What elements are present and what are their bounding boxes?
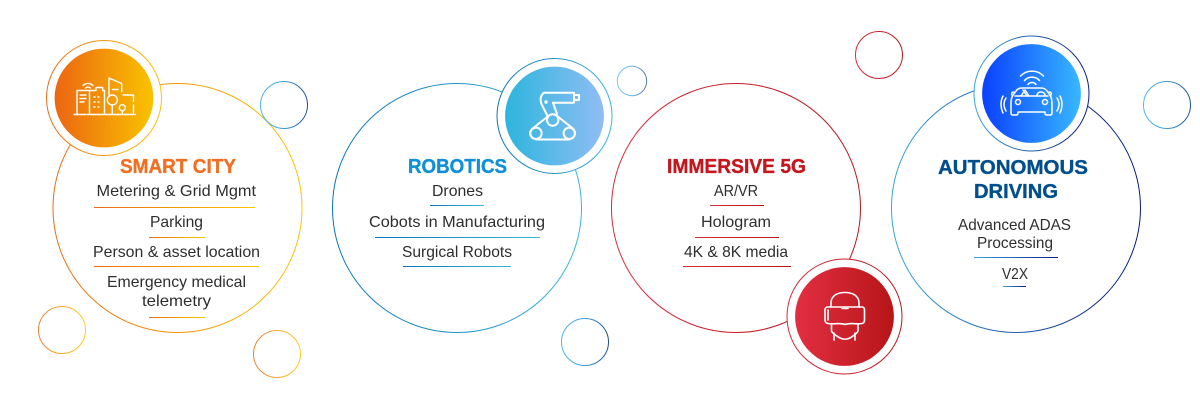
icon: vr headset: [787, 259, 902, 374]
smart city main circle: [53, 84, 302, 332]
robotics decorative bubble, bottom: [562, 318, 608, 366]
smart city decorative bubble, blue: [260, 82, 308, 128]
panel: immersive 5g: [612, 32, 902, 374]
smart city decorative bubble, lower left: [38, 306, 86, 354]
heading: autonomous driving: AUTONOMOUS: [938, 157, 1088, 179]
robotics main circle: [332, 84, 582, 332]
panel: autonomous driving: Processing: [977, 235, 1053, 252]
autonomous decorative bubble: [1144, 82, 1190, 128]
item: drones: Drones: [432, 183, 483, 200]
item: person and asset location: Person & asset location: [93, 244, 260, 261]
heading: autonomous driving: DRIVING: [974, 181, 1058, 203]
smart city decorative bubble, lower right: [254, 330, 300, 378]
icon: connected car: [974, 36, 1089, 151]
panel: robotics: [332, 58, 647, 366]
item: emergency medical telemetry: Emergency medical: [107, 274, 246, 291]
panel: smart city: telemetry: [142, 293, 211, 310]
icon: smart city buildings: [46, 40, 162, 156]
item: parking: Parking: [150, 214, 203, 231]
item: surgical robots: Surgical Robots: [402, 244, 512, 261]
robotics decorative bubble, top: [617, 66, 647, 96]
immersive main circle: [612, 84, 860, 332]
icon: robot arm: [497, 58, 612, 174]
autonomous main circle: [892, 84, 1140, 332]
item: metering: Metering & Grid Mgmt: [96, 183, 257, 200]
panel: autonomous driving: [892, 36, 1190, 332]
panel: smart city: [38, 40, 308, 378]
heading: immersive 5g: IMMERSIVE 5G: [667, 156, 806, 178]
immersive decorative bubble: [856, 32, 902, 78]
item: hologram: Hologram: [701, 214, 771, 231]
item: advanced adas processing: Advanced ADAS: [958, 217, 1071, 234]
heading: smart city: SMART CITY: [120, 156, 237, 178]
heading: robotics: ROBOTICS: [408, 156, 507, 178]
heading: autonomous driving: [938, 157, 1088, 203]
item: v2x: V2X: [1002, 266, 1028, 283]
item: 4k and 8k media: 4K & 8K media: [684, 244, 788, 261]
item: ar/vr: AR/VR: [714, 183, 758, 200]
item: cobots: Cobots in Manufacturing: [369, 214, 545, 231]
